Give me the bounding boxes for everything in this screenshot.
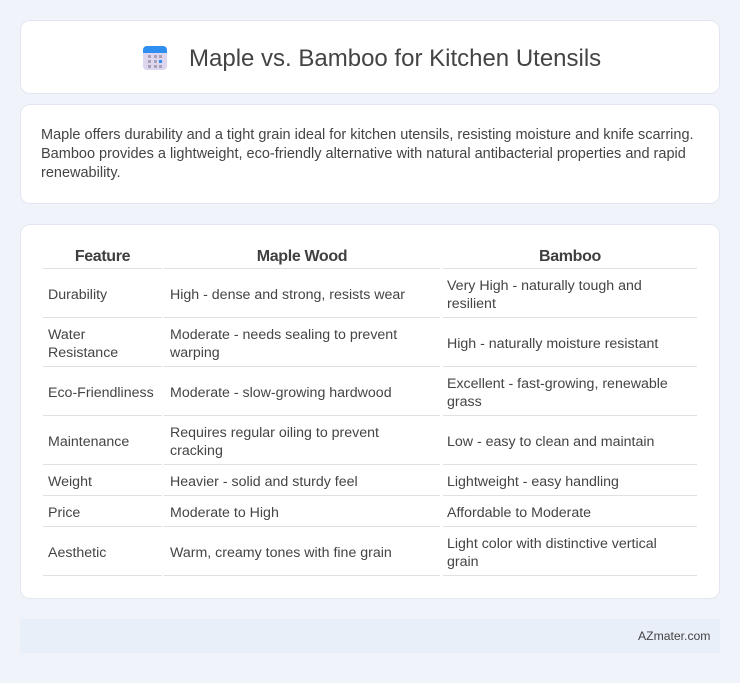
row: Water Resistance: [48, 327, 658, 361]
text: Water: [48, 327, 85, 343]
summary text: Maple offers durability and a tight grain ideal for kitchen utensils, resisting moisture and knife scarring.: [41, 127, 694, 143]
text: Durability: [48, 287, 107, 303]
summary text: [41, 127, 694, 181]
text: Maintenance: [48, 434, 129, 450]
panel: title card: [20, 20, 720, 94]
panel: summary card: [20, 104, 720, 204]
text: Light color with distinctive vertical: [447, 536, 657, 552]
text: High - dense and strong, resists wear: [170, 287, 405, 303]
table header: Maple Wood: Maple Wood: [257, 248, 347, 265]
text: Weight: [48, 474, 92, 490]
text: Excellent - fast-growing, renewable: [447, 376, 668, 392]
text: Moderate to High: [170, 505, 279, 521]
text: Eco-Friendliness: [48, 385, 154, 401]
row: Maintenance: [48, 425, 654, 459]
footer bar: [20, 619, 720, 653]
text: Aesthetic: [48, 545, 106, 561]
row: Price: [48, 505, 591, 521]
panel: comparison table card: [20, 224, 720, 599]
text: Low - easy to clean and maintain: [447, 434, 654, 450]
footer credit: AZmater.com: [638, 629, 710, 643]
text: Moderate - needs sealing to prevent: [170, 327, 397, 343]
table header: Feature: Feature: [75, 248, 130, 265]
text: Affordable to Moderate: [447, 505, 591, 521]
text: Lightweight - easy handling: [447, 474, 619, 490]
text: Requires regular oiling to prevent: [170, 425, 379, 441]
table header: Bamboo: Bamboo: [539, 248, 601, 265]
text: grass: [447, 394, 482, 410]
text: Moderate - slow-growing hardwood: [170, 385, 392, 401]
text: Price: [48, 505, 80, 521]
row: Durability: [48, 278, 642, 312]
title: Maple vs. Bamboo for Kitchen Utensils: [189, 45, 601, 72]
text: Heavier - solid and sturdy feel: [170, 474, 358, 490]
text: Warm, creamy tones with fine grain: [170, 545, 392, 561]
text: cracking: [170, 443, 223, 459]
text: Resistance: [48, 345, 118, 361]
row: Eco-Friendliness: [48, 376, 668, 410]
text: resilient: [447, 296, 496, 312]
icon: calendar: [143, 46, 167, 70]
row: Aesthetic: [48, 536, 657, 570]
summary text: Bamboo provides a lightweight, eco-friendly alternative with natural antibacterial properties and rapid: [41, 146, 686, 162]
text: grain: [447, 554, 479, 570]
text: warping: [170, 345, 220, 361]
row: Weight: [48, 474, 619, 490]
text: Very High - naturally tough and: [447, 278, 642, 294]
text: High - naturally moisture resistant: [447, 336, 658, 352]
summary text: renewability.: [41, 165, 121, 181]
